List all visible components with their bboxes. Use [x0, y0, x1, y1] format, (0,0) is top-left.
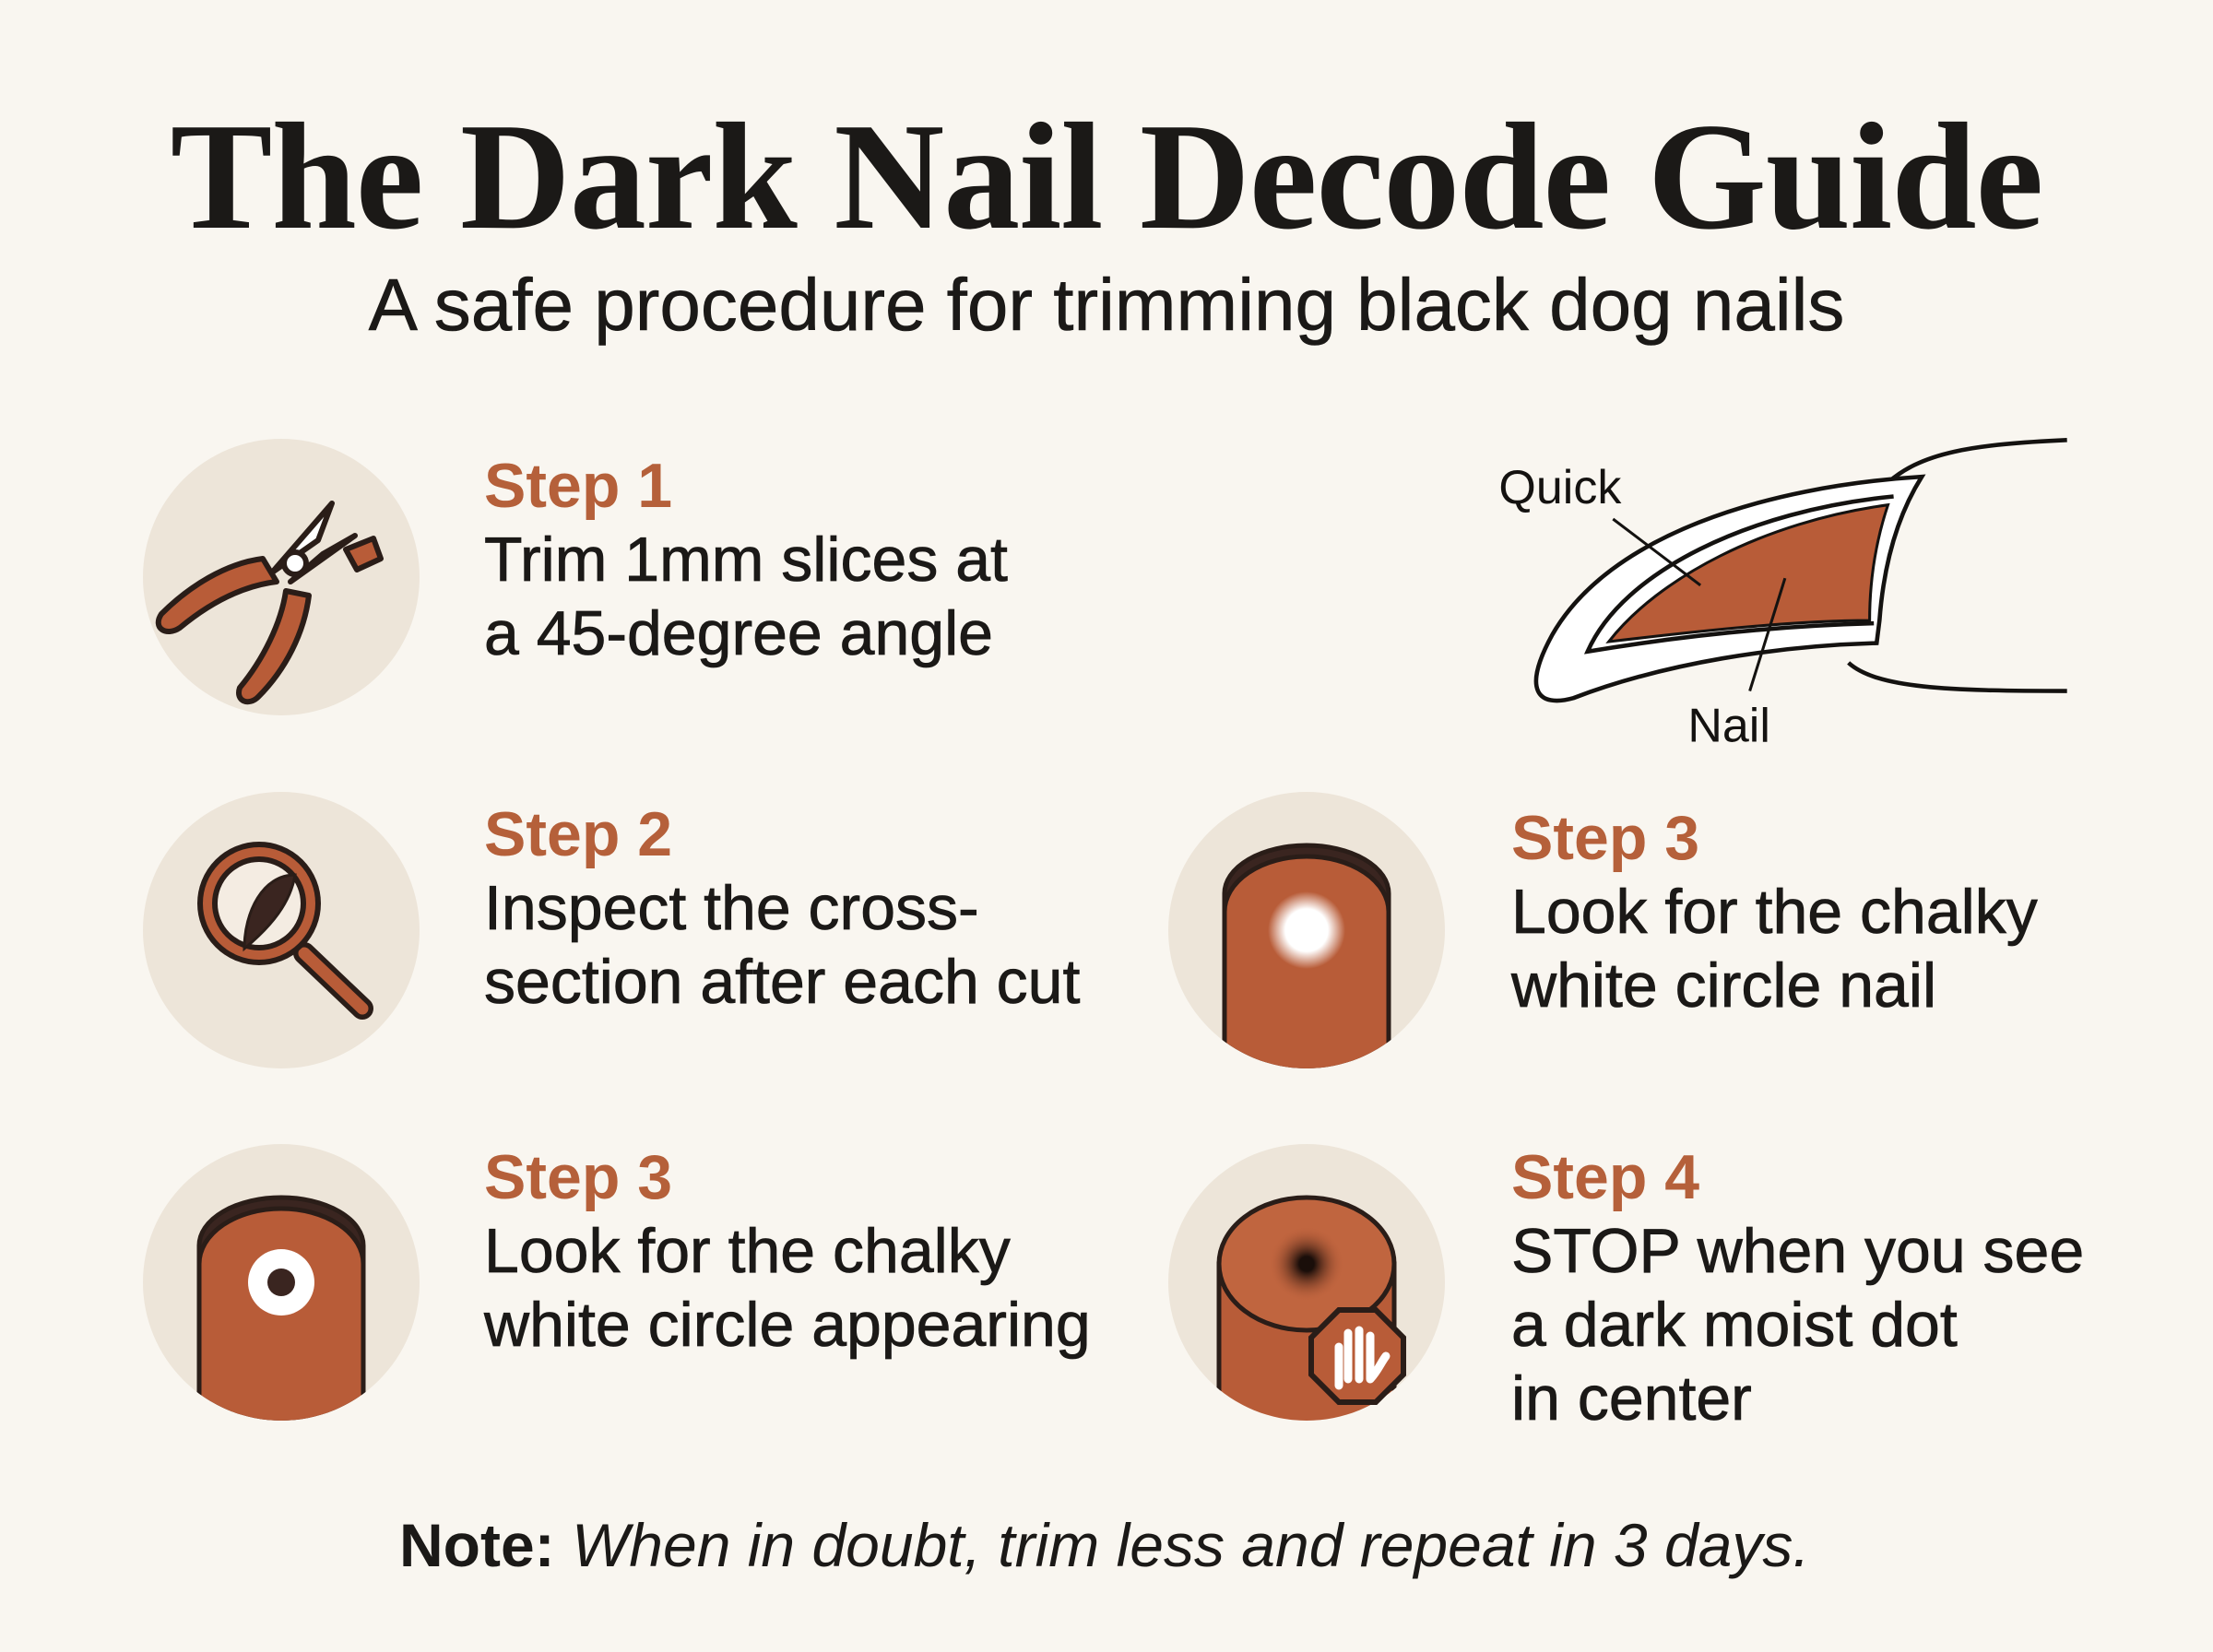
nail diagram: Quick [1498, 461, 1622, 514]
step 3 right text [1510, 803, 2038, 1021]
icon: dark dot stop [1168, 1144, 1445, 1421]
note: Note: When in doubt, trim less and repeat in 3 days. [399, 1511, 1810, 1579]
step 4 text [1511, 1142, 2084, 1434]
title: The Dark Nail Decode Guide [171, 91, 2042, 261]
subtitle: A safe procedure for trimming black dog nails [369, 264, 1844, 346]
step 1 text: Trim 1mm slices at [484, 525, 1008, 595]
step 1 text [484, 451, 1008, 668]
step 2 text: Inspect the cross- [484, 873, 979, 943]
step 4 text: a dark moist dot [1511, 1290, 1958, 1360]
step 3 right text: Look for the chalky [1511, 877, 2038, 947]
step 4 text: STOP when you see [1511, 1216, 2084, 1286]
step 1 text: Step 1 [484, 451, 672, 521]
step 2 text [484, 799, 1081, 1017]
step 4 text: Step 4 [1511, 1142, 1699, 1212]
icon: nail white circle [1168, 792, 1445, 1068]
step 1 text: a 45-degree angle [484, 598, 993, 668]
icon: clippers [143, 439, 420, 715]
step 2 text: Step 2 [484, 799, 672, 869]
icon: magnifier [143, 792, 420, 1068]
step 4 text: in center [1511, 1363, 1752, 1434]
step 3 bottom text: white circle appearing [484, 1290, 1091, 1360]
icon: nail ring [143, 1144, 420, 1421]
step 3 bottom text: Step 3 [484, 1142, 672, 1212]
nail diagram: Nail [1687, 700, 1770, 753]
step 3 bottom text [483, 1142, 1091, 1360]
step 3 right text: Step 3 [1511, 803, 1699, 873]
step 3 right text: white circle nail [1511, 950, 1936, 1021]
step 3 bottom text: Look for the chalky [484, 1216, 1011, 1286]
nail diagram [1498, 438, 2067, 753]
step 2 text: section after each cut [484, 947, 1080, 1017]
